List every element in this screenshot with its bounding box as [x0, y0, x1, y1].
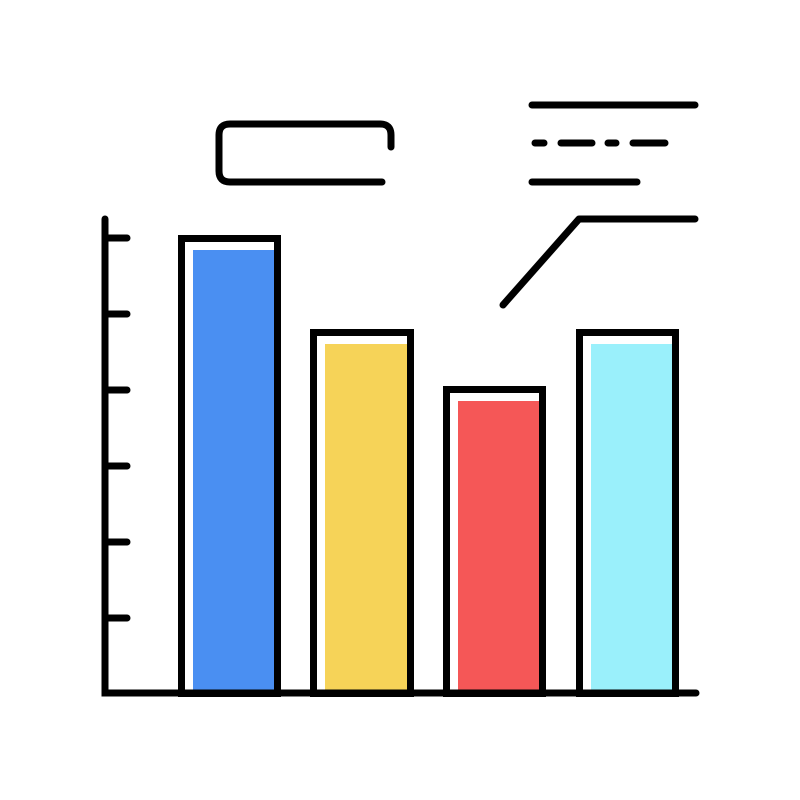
- axes with ticks: [105, 219, 696, 693]
- callout pointer line: [503, 219, 695, 305]
- text lines: [532, 105, 695, 182]
- label box: [219, 124, 391, 182]
- bar: red: [446, 390, 542, 694]
- bar: yellow: [314, 332, 410, 694]
- bar: cyan: [580, 332, 676, 694]
- bar: blue: [182, 238, 278, 694]
